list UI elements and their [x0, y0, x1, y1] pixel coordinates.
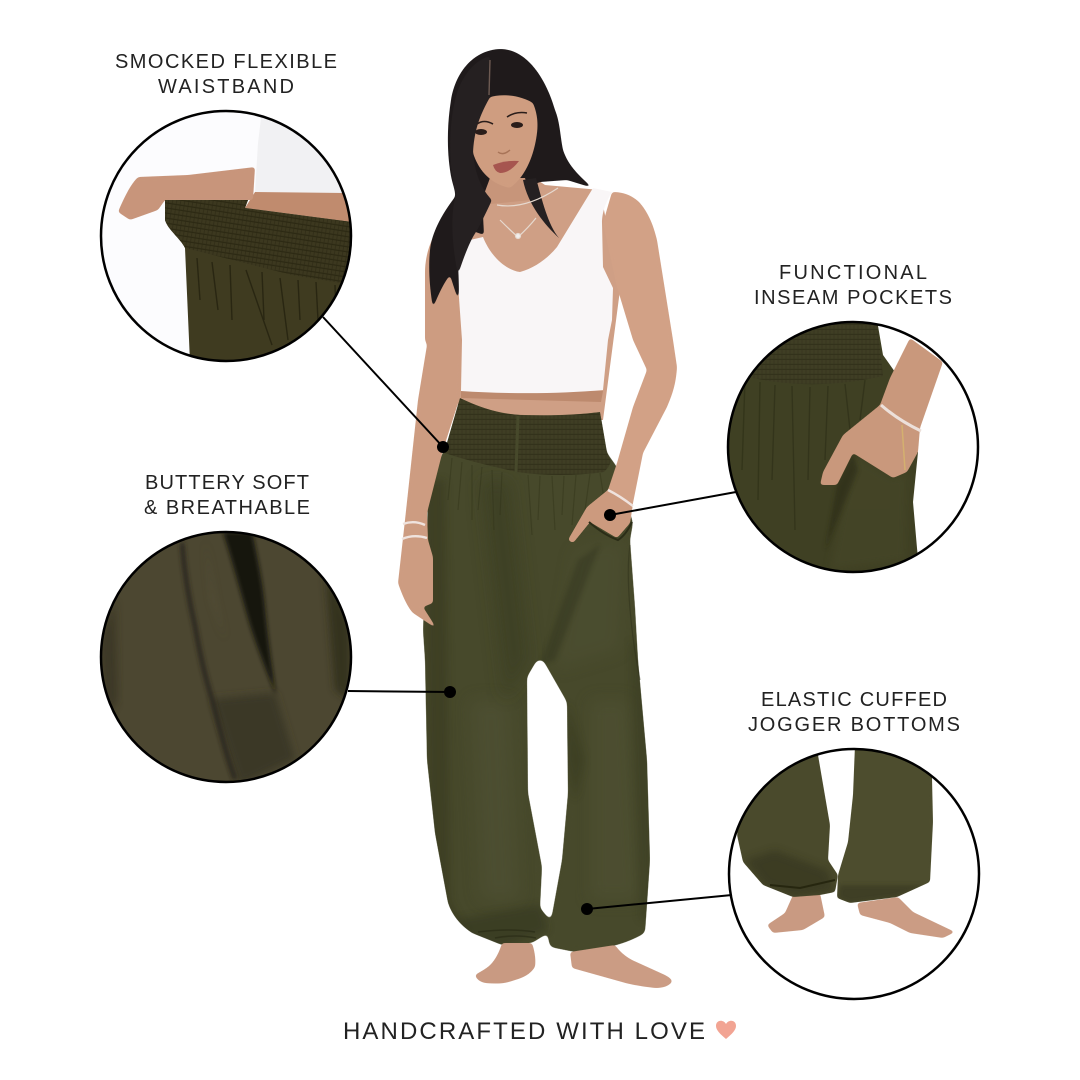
- cuff gathers: [478, 930, 536, 938]
- white crop top: [457, 188, 613, 393]
- bracelets: [402, 490, 633, 539]
- pocket shading: [830, 453, 907, 570]
- infographic canvas: [100, 49, 980, 1039]
- label: pockets: [754, 262, 952, 309]
- model figure: [398, 49, 677, 988]
- pants area: [725, 320, 920, 580]
- panel: waistband detail: [118, 118, 350, 360]
- left foot: [475, 943, 535, 984]
- face: [473, 95, 538, 188]
- circle outline: pockets: [728, 322, 978, 572]
- panel: pockets detail: [725, 320, 943, 580]
- panel: fabric detail: [100, 530, 352, 785]
- label: pockets: FUNCTIONAL: [779, 262, 927, 284]
- facial details: [475, 112, 527, 173]
- left rim: [102, 612, 118, 707]
- pants detail: [165, 200, 352, 362]
- waistband smocking: [445, 398, 610, 475]
- label: waistband: WAISTBAND: [158, 76, 294, 98]
- pants silhouette: [423, 398, 650, 952]
- left foot: [767, 893, 825, 933]
- right foot: [570, 945, 672, 988]
- right hair strand: [523, 178, 559, 238]
- bracelet: [881, 405, 921, 431]
- pants: [423, 398, 650, 952]
- footer tagline: HANDCRAFTED WITH LOVE: [343, 1018, 705, 1045]
- pants shading: [425, 480, 650, 948]
- label: cuffs: [748, 689, 960, 736]
- edge shading: [325, 570, 350, 700]
- thin fold: [182, 543, 235, 779]
- smocking band: [752, 324, 883, 384]
- hair front strands: [450, 56, 492, 275]
- lower darker panel: [216, 693, 294, 780]
- forearm and hand: [820, 338, 943, 485]
- background: [100, 110, 352, 362]
- gathers: [742, 380, 865, 530]
- connector: pockets: [604, 492, 736, 521]
- connector: waistband: [323, 317, 449, 453]
- connector: fabric: [348, 686, 456, 698]
- circle outline: cuffs: [729, 749, 979, 999]
- side seam: [628, 545, 640, 680]
- fabric: [100, 530, 352, 784]
- fold highlight: [205, 540, 225, 640]
- label: fabric: & BREATHABLE: [144, 497, 310, 519]
- gather folds: [197, 258, 336, 345]
- right leg: [837, 745, 933, 903]
- right arm: [568, 192, 677, 543]
- label: waistband: SMOCKED FLEXIBLE: [115, 51, 337, 73]
- necklace: [497, 188, 558, 238]
- right cuff shadow: [838, 885, 925, 903]
- icon: heart: [716, 1021, 736, 1039]
- label: waistband: [115, 51, 337, 98]
- label: pockets: INSEAM POCKETS: [754, 287, 952, 309]
- deep fold: [223, 532, 276, 695]
- hair back: [429, 49, 593, 308]
- arm and hand: [118, 167, 255, 220]
- circle outline: waistband: [101, 111, 351, 361]
- panel: cuffs detail: [737, 745, 955, 938]
- label: cuffs: JOGGER BOTTOMS: [748, 714, 960, 736]
- midriff shadow: [461, 391, 603, 402]
- connector: cuffs: [581, 895, 732, 915]
- neck: [480, 178, 532, 205]
- label: cuffs: ELASTIC CUFFED: [761, 689, 947, 711]
- center seam: [516, 416, 518, 472]
- left cuff shadow: [745, 850, 835, 897]
- hair part highlight: [489, 60, 490, 95]
- left arm: [398, 230, 463, 629]
- crop top: [255, 118, 342, 193]
- hand in pocket: [568, 490, 633, 543]
- bracelet chain: [902, 425, 905, 470]
- torso skin: [456, 170, 620, 420]
- circle outline: fabric: [101, 532, 351, 782]
- right foot: [857, 897, 955, 938]
- label: fabric: [144, 472, 310, 519]
- left leg: [737, 745, 838, 897]
- label: fabric: BUTTERY SOFT: [145, 472, 309, 494]
- pocket opening: [589, 522, 632, 540]
- gathers: [448, 458, 605, 535]
- smocking band: [165, 200, 352, 285]
- midriff skin: [245, 192, 352, 222]
